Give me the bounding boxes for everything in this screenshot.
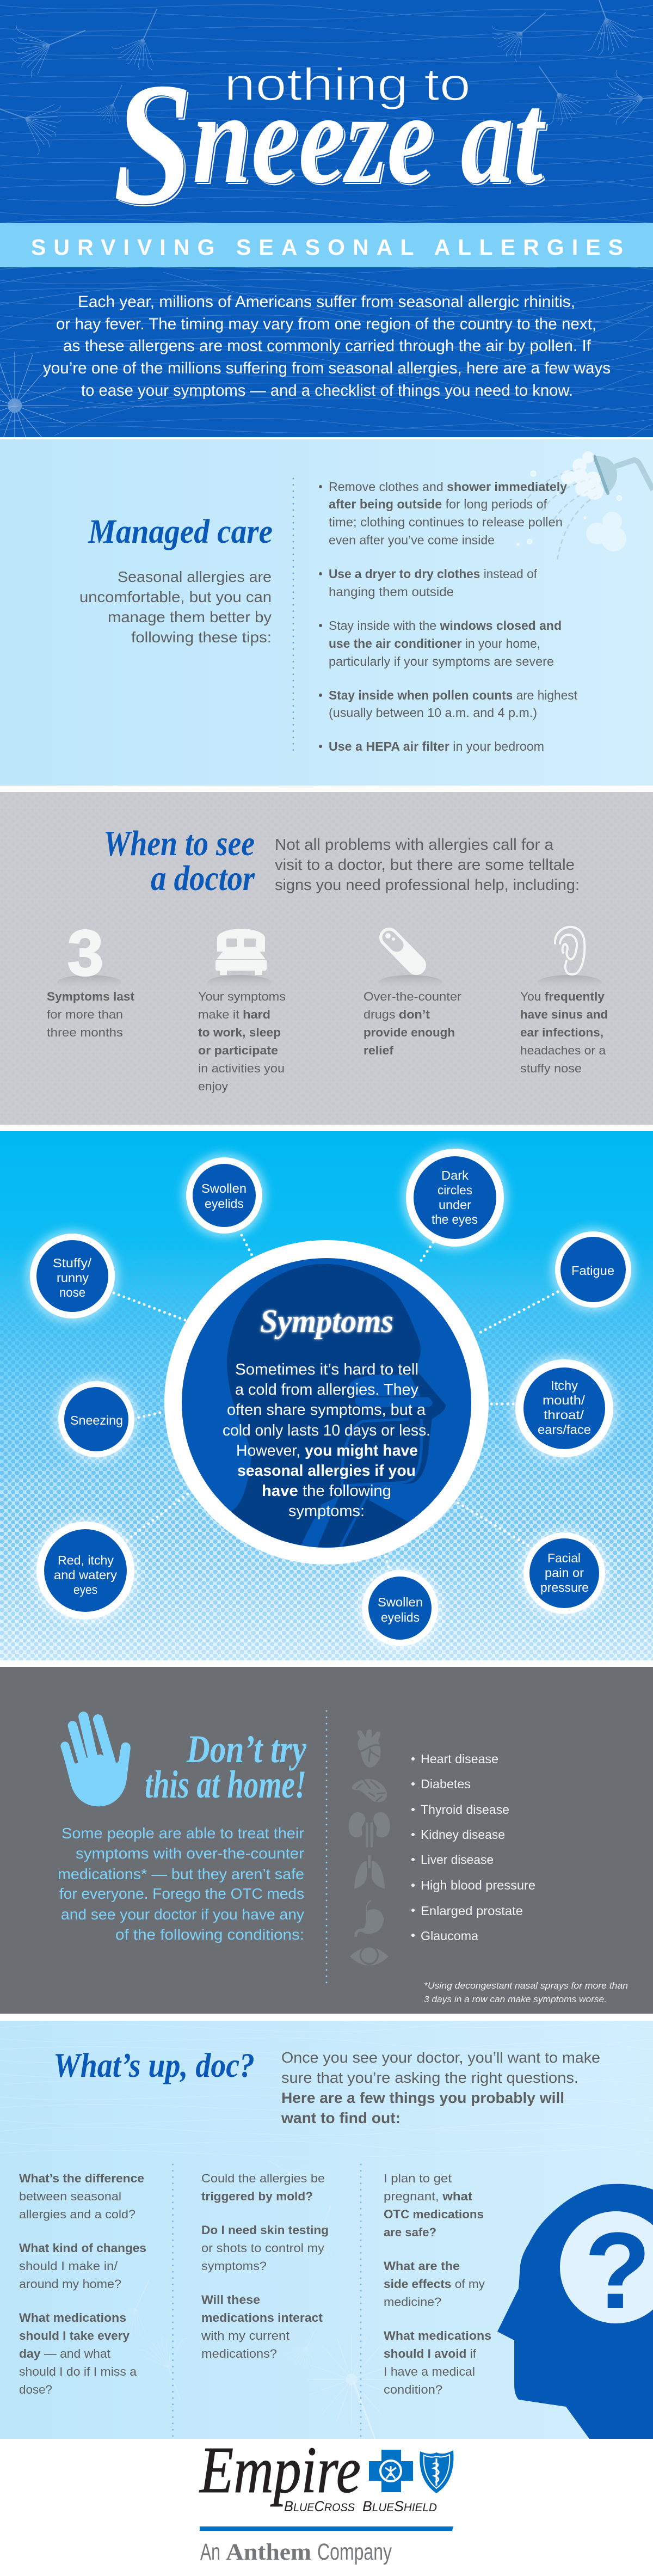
list: conditions: Kidney disease xyxy=(421,1827,505,1842)
icons: organs xyxy=(349,1729,390,1966)
list: conditions: Liver disease xyxy=(421,1853,494,1867)
questions: column 1: around my home? xyxy=(19,2277,121,2291)
text: sign 3: Over-the-counter xyxy=(364,990,461,1003)
heading: don't try this at home xyxy=(145,1727,307,1806)
list: managed care tips xyxy=(319,480,578,753)
text block: symptoms intro: a cold from allergies. They xyxy=(235,1381,418,1399)
text block: managed care intro: following these tips: xyxy=(131,629,272,646)
wordmark: BlueCross BlueShield xyxy=(284,2498,437,2514)
questions: column 3: are safe? xyxy=(384,2225,436,2239)
text: sign 3 xyxy=(364,990,461,1057)
text block: warning: symptoms with over-the-counter xyxy=(76,1845,304,1862)
text block: symptoms intro xyxy=(223,1361,430,1520)
connectors: dotted lines xyxy=(114,1235,558,1569)
list: managed care tips: Use a dryer to dry clothes instead of xyxy=(329,567,538,581)
text: sign 2: make it hard xyxy=(198,1008,270,1021)
text block: symptoms intro: seasonal allergies if you xyxy=(237,1462,416,1480)
text block: symptoms intro: However, you might have xyxy=(236,1442,418,1459)
bubble: facial pain: pain or xyxy=(545,1566,584,1580)
questions: column 1: allergies and a cold? xyxy=(19,2207,135,2221)
questions: column 2: Could the allergies be xyxy=(201,2172,325,2185)
text: sign 2 xyxy=(198,990,286,1093)
decorative seeds: faint dandelions xyxy=(102,2148,396,2439)
text: sign 2: to work, sleep xyxy=(198,1026,281,1039)
wordmark: Empire: Empire xyxy=(199,2433,361,2507)
text block: when to see intro: signs you need professional help, including: xyxy=(275,876,580,894)
bubble: itchy: ears/face xyxy=(538,1422,591,1437)
bubble: stuffy nose: nose xyxy=(59,1285,85,1299)
tagline: An Anthem Company: Company xyxy=(317,2539,392,2565)
bubble: swollen eyelids top: Swollen xyxy=(201,1181,247,1195)
logo: Empire Blue Cross Blue Shield xyxy=(0,2433,653,2576)
text block: symptoms intro: Sometimes it’s hard to tell xyxy=(235,1361,418,1378)
bubble: itchy: throat/ xyxy=(544,1408,584,1422)
bubble: dark circles: under xyxy=(439,1198,471,1212)
footnote: 3 days in a row can make symptoms worse. xyxy=(424,1994,607,2004)
illustration: head silhouette xyxy=(227,1264,446,1550)
text block: symptoms intro: have the following xyxy=(262,1482,391,1500)
illustration: head with question mark: ? xyxy=(584,2210,651,2332)
text: sign 4 xyxy=(520,990,608,1075)
text: sign 3: drugs don’t xyxy=(364,1008,430,1021)
footnote xyxy=(424,1980,628,2004)
questions: column 3: What are the xyxy=(384,2259,460,2273)
questions: column 1: should I do if I miss a xyxy=(19,2365,137,2378)
list: managed care tips: Remove clothes and shower immediately xyxy=(329,480,567,494)
text: sign 1: Symptoms last xyxy=(47,990,135,1003)
text block: symptoms intro: often share symptoms, but a xyxy=(227,1401,426,1419)
questions: column 1: should I take every xyxy=(19,2329,130,2342)
text block: warning: medications* — but they aren’t safe xyxy=(58,1866,304,1882)
text block: hero intro: Each year, millions of Americans suffer from seasonal allergic rhinitis, xyxy=(78,293,575,311)
bubble: stuffy nose xyxy=(26,1229,119,1323)
questions: column 2: symptoms? xyxy=(201,2259,267,2273)
icon: shower head xyxy=(517,451,653,560)
heading: when to see a doctor: a doctor xyxy=(151,858,255,898)
questions: column 1: should I make in/ xyxy=(19,2259,118,2273)
text: sign 1 xyxy=(47,990,135,1039)
text block: doctor intro: sure that you’re asking the right questions. xyxy=(281,2069,578,2086)
bubble: itchy: Itchy xyxy=(551,1378,578,1393)
list: conditions: Enlarged prostate xyxy=(421,1904,523,1918)
bubble: facial pain xyxy=(519,1528,609,1618)
icon: pill xyxy=(378,933,442,990)
list: managed care tips: even after you’ve come inside xyxy=(329,533,495,547)
list: conditions: Thyroid disease xyxy=(421,1802,509,1817)
panel: managed care xyxy=(0,439,653,786)
list: managed care tips: hanging them outside xyxy=(329,585,454,599)
bubble: fatigue xyxy=(551,1227,636,1312)
questions: column 2: Will these xyxy=(201,2293,260,2307)
icon: bed xyxy=(207,929,272,990)
icon: number 3: 3 xyxy=(67,917,103,989)
text block: doctor intro: Once you see your doctor, you’ll want to make xyxy=(281,2049,600,2066)
heading: don't try this at home: this at home! xyxy=(145,1763,306,1806)
list: conditions: Glaucoma xyxy=(421,1929,478,1943)
decorative seeds: floating dandelion seeds xyxy=(0,0,653,459)
questions: column 3: should I avoid if xyxy=(384,2347,477,2360)
text: sign 4: stuffy nose xyxy=(520,1062,582,1075)
list: managed care tips: (usually between 10 a.m. and 4 p.m.) xyxy=(329,706,537,720)
text: sign 3: provide enough xyxy=(364,1026,455,1039)
banner: subtitle band xyxy=(0,223,653,267)
text: sign 2: in activities you xyxy=(198,1062,285,1075)
wordmark: BlueCross BlueShield: BLUESHIELD xyxy=(362,2498,437,2514)
list: managed care tips: time; clothing continues to release pollen xyxy=(329,515,563,529)
questions: column 3: I plan to get xyxy=(384,2172,452,2185)
bubble: fatigue: Fatigue xyxy=(571,1264,614,1278)
title: Sneeze at: neeze at xyxy=(193,65,546,210)
text block: managed care intro: Seasonal allergies are xyxy=(118,568,272,585)
bubble: itchy xyxy=(511,1355,618,1462)
text block: when to see intro xyxy=(275,836,580,894)
questions: column 1: What medications xyxy=(19,2311,126,2324)
text: sign 1: for more than xyxy=(47,1008,123,1021)
text block: hero intro: to ease your symptoms — and a checklist of things you need to know. xyxy=(81,382,573,400)
questions: column 2 xyxy=(201,2172,329,2360)
text block: warning: of the following conditions: xyxy=(115,1926,304,1943)
bubble: swollen eyelids bottom xyxy=(358,1566,442,1651)
questions: column 1 xyxy=(19,2172,146,2396)
bubble: sneezing xyxy=(54,1377,139,1462)
text: sign 2: Your symptoms xyxy=(198,990,286,1003)
questions: column 2: triggered by mold? xyxy=(201,2189,313,2203)
text block: doctor intro: want to find out: xyxy=(281,2109,401,2126)
questions: column 2: Do I need skin testing xyxy=(201,2223,329,2237)
text block: managed care intro xyxy=(79,568,272,646)
tagline: An Anthem Company: An xyxy=(200,2539,220,2565)
text block: managed care intro: uncomfortable, but you can xyxy=(79,588,272,605)
tagline: An Anthem Company xyxy=(200,2539,392,2565)
bubble: stuffy nose: runny xyxy=(57,1271,89,1285)
list: conditions: Diabetes xyxy=(421,1777,471,1791)
tagline: An Anthem Company: Anthem xyxy=(226,2540,311,2565)
questions: column 1: What kind of changes xyxy=(19,2241,146,2255)
list: conditions: High blood pressure xyxy=(421,1878,535,1892)
list: managed care tips: particularly if your symptoms are severe xyxy=(329,654,554,668)
questions: column 1: day — and what xyxy=(19,2347,110,2360)
text block: when to see intro: Not all problems with allergies call for a xyxy=(275,836,554,854)
questions: column 3: pregnant, what xyxy=(384,2189,473,2203)
divider bar xyxy=(200,2526,453,2531)
list: managed care tips: after being outside for long periods of xyxy=(329,497,547,511)
icon: number 3 xyxy=(57,917,121,990)
text block: warning: for everyone. Forego the OTC meds xyxy=(59,1885,304,1902)
icon: blue cross xyxy=(369,2450,413,2492)
heading: don't try this at home: Don’t try xyxy=(186,1727,307,1771)
list: managed care tips: Use a HEPA air filter in your bedroom xyxy=(329,739,544,753)
questions: column 1: What’s the difference xyxy=(19,2172,144,2185)
text: sign 4: You frequently xyxy=(520,990,605,1003)
title: Sneeze at: S xyxy=(113,46,193,241)
list: managed care tips: Stay inside with the windows closed and xyxy=(329,618,562,633)
bubble: itchy: mouth/ xyxy=(543,1393,586,1407)
questions: column 3: I have a medical xyxy=(384,2365,475,2378)
list: conditions xyxy=(411,1752,535,1943)
text block: warning: and see your doctor if you have any xyxy=(61,1906,304,1923)
questions: column 3: condition? xyxy=(384,2383,442,2396)
icon: hand xyxy=(61,1716,131,1806)
text block: doctor intro: Here are a few things you probably will xyxy=(281,2089,564,2106)
panel: symptoms xyxy=(0,1131,653,1660)
title: nothing to: nothing to xyxy=(224,59,471,110)
bubble: red eyes: Red, itchy xyxy=(58,1553,114,1567)
heading: when to see a doctor: When to see xyxy=(103,824,255,863)
text block: hero intro: you’re one of the millions suffering from seasonal allergies, here are a few ways xyxy=(43,359,611,377)
text block: symptoms intro: symptoms: xyxy=(288,1502,365,1520)
text block: managed care intro: manage them better by xyxy=(108,609,272,625)
bubble: facial pain: Facial xyxy=(547,1551,581,1565)
questions: column 3: What medications xyxy=(384,2329,491,2342)
panel: what's up doc xyxy=(0,2021,653,2439)
bubble: swollen eyelids bottom: eyelids xyxy=(381,1610,420,1624)
questions: column 2: medications? xyxy=(201,2347,277,2360)
bubble: swollen eyelids bottom: Swollen xyxy=(378,1595,423,1609)
questions: column 1: between seasonal xyxy=(19,2189,121,2203)
list: conditions: Heart disease xyxy=(421,1752,498,1766)
text: sign 4: headaches or a xyxy=(520,1044,606,1057)
central circle xyxy=(164,1240,489,1565)
footnote: *Using decongestant nasal sprays for more than xyxy=(424,1980,628,1991)
heading: symptoms: Symptoms xyxy=(260,1303,393,1339)
questions: column 3: medicine? xyxy=(384,2295,441,2309)
bubble: dark circles xyxy=(402,1144,508,1251)
text block: hero intro xyxy=(43,293,611,400)
bubble: dark circles: circles xyxy=(438,1183,472,1197)
questions: column 3 xyxy=(384,2172,491,2396)
text: sign 1: three months xyxy=(47,1026,123,1039)
bubble: red eyes: eyes xyxy=(73,1583,97,1597)
icon: ear xyxy=(538,927,602,990)
questions: column 2: with my current xyxy=(201,2329,289,2342)
illustration: head with question mark xyxy=(497,2184,653,2439)
icon: blue shield xyxy=(420,2450,453,2493)
bubble: swollen eyelids top xyxy=(182,1153,267,1238)
questions: column 2: or shots to control my xyxy=(201,2241,324,2255)
text: sign 2: enjoy xyxy=(198,1080,228,1093)
text: sign 4: ear infections, xyxy=(520,1026,603,1039)
list: managed care tips: Stay inside when pollen counts are highest xyxy=(329,688,578,702)
panel: don't try this at home xyxy=(0,1667,653,2014)
bubble: red eyes: and watery xyxy=(54,1568,118,1582)
text block: warning xyxy=(58,1825,304,1943)
heading: what's up doc: What’s up, doc? xyxy=(53,2046,255,2084)
bubble: dark circles: the eyes xyxy=(432,1212,478,1226)
text: sign 2: or participate xyxy=(198,1044,278,1057)
text block: when to see intro: visit to a doctor, but there are some telltale xyxy=(275,856,575,874)
heading: when to see a doctor xyxy=(103,824,255,898)
panel: hero header xyxy=(0,0,653,459)
text: sign 4: have sinus and xyxy=(520,1008,608,1021)
bubble: dark circles: Dark xyxy=(441,1168,469,1182)
bubble: sneezing: Sneezing xyxy=(70,1413,123,1427)
questions: column 3: OTC medications xyxy=(384,2207,484,2221)
bubble: stuffy nose: Stuffy/ xyxy=(53,1256,92,1270)
text block: hero intro: or hay fever. The timing may vary from one region of the country to the next, xyxy=(56,315,596,333)
questions: column 2: medications interact xyxy=(201,2311,323,2324)
list: managed care tips: use the air conditioner in your home, xyxy=(329,636,540,651)
text block: symptoms intro: cold only lasts 10 days or less. xyxy=(223,1422,430,1439)
text: sign 3: relief xyxy=(364,1044,394,1057)
panel: when to see a doctor xyxy=(0,792,653,1125)
banner: subtitle band: SURVIVING SEASONAL ALLERGIES xyxy=(31,235,623,260)
text block: doctor intro xyxy=(281,2049,600,2126)
heading: managed care: Managed care xyxy=(88,513,273,550)
text block: hero intro: as these allergens are most commonly carried through the air by pollen. If xyxy=(63,337,592,355)
bubble: swollen eyelids top: eyelids xyxy=(205,1197,244,1211)
bubble: facial pain: pressure xyxy=(540,1580,589,1594)
questions: column 1: dose? xyxy=(19,2383,52,2396)
text block: warning: Some people are able to treat their xyxy=(61,1825,304,1842)
questions: column 3: side effects of my xyxy=(384,2277,485,2291)
wordmark: BlueCross BlueShield: BLUECROSS xyxy=(284,2498,355,2514)
bubble: red eyes xyxy=(32,1517,139,1624)
